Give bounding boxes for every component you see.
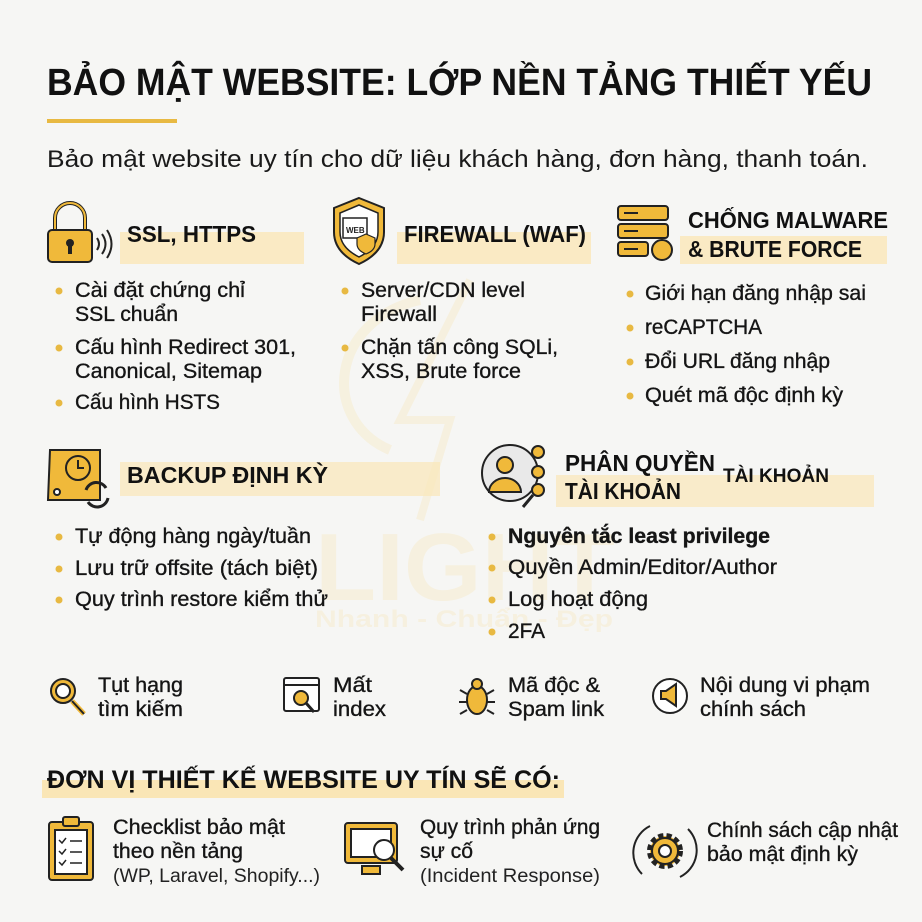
- panel: backup: [48, 450, 440, 611]
- panel: SSL HTTPS: [48, 203, 304, 414]
- icon: bug: [459, 679, 495, 714]
- row: risks: chính sách: [700, 698, 806, 721]
- icon: backup drive: [48, 450, 108, 507]
- bullets: [56, 288, 62, 406]
- bottom items: Chính sách cập nhật: [707, 819, 898, 842]
- row: risks: [51, 674, 870, 721]
- panel: firewall: Chặn tấn công SQLi,: [361, 336, 558, 359]
- bottom items: Checklist bảo mật: [113, 816, 285, 839]
- panel: malware: reCAPTCHA: [645, 316, 762, 339]
- bottom items: [49, 816, 898, 887]
- row: risks: Spam link: [508, 698, 605, 721]
- panel: malware: & BRUTE FORCE: [688, 236, 862, 262]
- panel: backup: Quy trình restore kiểm thử: [75, 588, 328, 611]
- watermark logo: [315, 280, 615, 633]
- panel: malware: CHỐNG MALWARE: [688, 206, 888, 233]
- icon: clipboard: [49, 817, 93, 880]
- panel: permissions: TÀI KHOẢN: [723, 465, 829, 487]
- panel: SSL HTTPS: SSL, HTTPS: [127, 221, 256, 247]
- bottom items: sự cố: [420, 840, 473, 863]
- icon: magnifier: [51, 679, 84, 714]
- panel: permissions: PHÂN QUYỀN: [565, 449, 715, 476]
- panel: SSL HTTPS: Canonical, Sitemap: [75, 360, 262, 383]
- panel: malware: [618, 206, 888, 407]
- icon: servers with bug: [618, 206, 672, 260]
- icon: shield: [334, 198, 384, 264]
- bottom items: theo nền tảng: [113, 840, 243, 863]
- panel: permissions: 2FA: [508, 620, 545, 643]
- bottom items: Quy trình phản ứng: [420, 816, 600, 839]
- title: BẢO MẬT WEBSITE: LỚP NỀN TẢNG THIẾT YẾU: [47, 60, 872, 104]
- watermark logo: LIGHT: [315, 514, 615, 621]
- panel: backup: BACKUP ĐỊNH KỲ: [127, 461, 328, 488]
- icon: browser search: [284, 678, 319, 712]
- bottom items: bảo mật định kỳ: [707, 843, 858, 866]
- row: risks: Mã độc &: [508, 674, 600, 697]
- panel: permissions: Nguyên tắc least privilege: [508, 524, 770, 548]
- icon: gear cycle: [633, 826, 697, 877]
- panel: malware: Giới hạn đăng nhập sai: [645, 282, 866, 305]
- panel: permissions: [482, 445, 874, 643]
- row: risks: tìm kiếm: [98, 698, 183, 721]
- panel: SSL HTTPS: Cấu hình Redirect 301,: [75, 336, 296, 359]
- row: risks: Mất: [333, 674, 372, 697]
- bottom items: (Incident Response): [420, 866, 600, 887]
- icon: users and key: [482, 445, 544, 507]
- panel: backup: Tự động hàng ngày/tuần: [75, 525, 311, 548]
- panel: backup: Lưu trữ offsite (tách biệt): [75, 557, 318, 580]
- panel: firewall: Server/CDN level: [361, 279, 525, 302]
- row: risks: Nội dung vi phạm: [700, 674, 870, 697]
- panel: SSL HTTPS: Cấu hình HSTS: [75, 391, 220, 414]
- icon: shield: WEB: [346, 226, 365, 235]
- row: risks: Tụt hạng: [98, 674, 183, 697]
- panel: SSL HTTPS: Cài đặt chứng chỉ: [75, 279, 245, 302]
- panel: malware: Đổi URL đăng nhập: [645, 350, 830, 373]
- title underline: [47, 119, 177, 123]
- panel: firewall: [334, 198, 591, 383]
- panel: firewall: FIREWALL (WAF): [404, 221, 586, 247]
- panel: SSL HTTPS: SSL chuẩn: [75, 303, 178, 326]
- panel: permissions: Quyền Admin/Editor/Author: [508, 556, 777, 579]
- panel: permissions: Log hoạt động: [508, 588, 648, 611]
- panel: firewall: XSS, Brute force: [361, 360, 521, 383]
- watermark logo: Nhanh - Chuẩn - Đẹp: [315, 606, 613, 633]
- bottom items: (WP, Laravel, Shopify...): [113, 866, 320, 887]
- panel: firewall: Firewall: [361, 303, 437, 326]
- panel: permissions: TÀI KHOẢN: [565, 476, 681, 504]
- subtitle: Bảo mật website uy tín cho dữ liệu khách hàng, đơn hàng, thanh toán.: [47, 146, 868, 173]
- row: risks: index: [333, 698, 387, 721]
- icon: monitor search: [345, 823, 403, 874]
- icon: lock: [48, 203, 112, 262]
- bottom heading: ĐƠN VỊ THIẾT KẾ WEBSITE UY TÍN SẼ CÓ:: [47, 764, 560, 794]
- panel: malware: Quét mã độc định kỳ: [645, 384, 844, 407]
- icon: megaphone: [653, 679, 687, 713]
